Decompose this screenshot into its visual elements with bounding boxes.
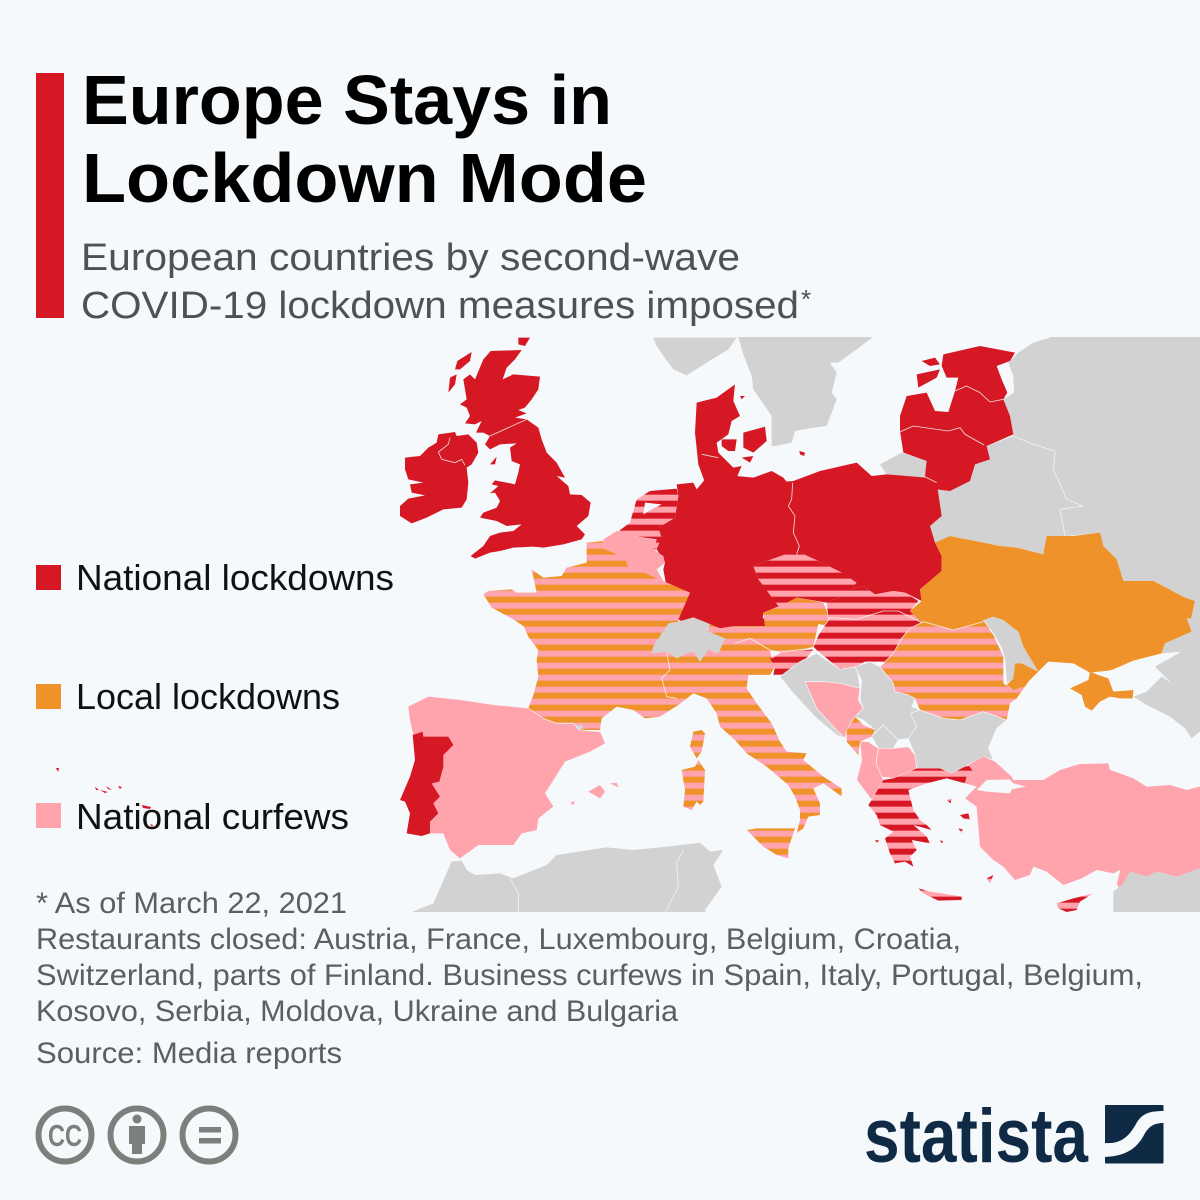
- Lesbos and Chios: [958, 813, 970, 833]
- legend item: national lockdowns: National lockdowns: [76, 557, 394, 598]
- title: [82, 61, 647, 217]
- Corsica: [690, 730, 705, 758]
- border lines: [772, 611, 1120, 883]
- Norway: [653, 338, 737, 375]
- Ukraine north: [910, 533, 1195, 629]
- Spain: [408, 697, 605, 858]
- source: Source: Media reports: [36, 1037, 342, 1070]
- legend: [36, 557, 394, 837]
- Italy: [662, 638, 842, 833]
- Kosovo: [872, 725, 898, 748]
- southern Russia: [1133, 618, 1200, 738]
- Slovenia: [770, 649, 813, 675]
- Portugal: [400, 732, 453, 836]
- Sweden: [738, 337, 873, 446]
- logo: statista icon: [1105, 1105, 1164, 1164]
- Great Britain: [460, 350, 591, 559]
- Germany: [657, 471, 800, 628]
- Sardinia: [682, 760, 705, 810]
- Middle East: [1113, 868, 1200, 913]
- Russia and Belarus: [930, 337, 1200, 629]
- North Africa: [408, 843, 723, 913]
- Montenegro: [847, 717, 875, 755]
- icon: creative commons: [38, 1108, 92, 1162]
- Bulgaria: [908, 710, 1007, 773]
- Lithuania: [900, 426, 990, 491]
- footnote: * As of March 22, 2021: [36, 887, 347, 920]
- subtitle: *: [801, 284, 811, 314]
- logo: statista wordmark: statista: [864, 1094, 1089, 1179]
- Ukraine south: [920, 617, 1192, 673]
- Albania: [857, 742, 883, 800]
- Moldova: [983, 617, 1038, 683]
- map region: north-west Europe: [400, 338, 800, 629]
- Hungary: [813, 611, 922, 670]
- Greece: [868, 765, 973, 867]
- Austria: [708, 598, 830, 653]
- Scottish islands: [448, 338, 530, 464]
- subtitle: COVID-19 lockdown measures imposed: [81, 285, 799, 327]
- subtitle: [81, 237, 811, 327]
- footnote: Restaurants closed: Austria, France, Luxembourg, Belgium, Croatia,: [36, 923, 961, 956]
- France north: [483, 541, 690, 629]
- Crimea: [1070, 672, 1133, 711]
- Ireland: [400, 432, 478, 523]
- Slovakia: [827, 586, 922, 623]
- Sea of Marmara: [977, 779, 1026, 793]
- border lines: [788, 386, 1083, 554]
- Cyprus: [1057, 893, 1093, 912]
- France south: [520, 618, 678, 730]
- map region: south-west Europe: [400, 598, 842, 913]
- Czech Republic: [753, 553, 857, 606]
- Odesa region: [1007, 663, 1038, 690]
- Netherlands: [617, 489, 678, 549]
- Serbia: [855, 662, 920, 740]
- title: Lockdown Mode: [82, 139, 647, 217]
- Estonian islands: [917, 358, 940, 388]
- legend item: national curfews: National curfews: [76, 796, 349, 837]
- Denmark: [695, 384, 767, 486]
- Estonia: [942, 346, 1015, 402]
- legend item: local lockdowns: Local lockdowns: [76, 676, 340, 717]
- Azores and Madeira islands: [56, 768, 153, 827]
- Bosnia and Herzegovina: [805, 682, 863, 738]
- Andorra: [575, 724, 583, 731]
- title accent bar: [36, 73, 64, 318]
- map region: south-east Europe: [770, 611, 1200, 913]
- footnote: [36, 887, 1143, 1028]
- border lines: [510, 638, 770, 913]
- Balearic Islands: [570, 783, 618, 805]
- map region: north-east Europe: [738, 337, 1200, 629]
- Kaliningrad: [880, 453, 927, 478]
- Belgium and Luxembourg: [603, 531, 665, 581]
- icon: attribution: [110, 1108, 164, 1162]
- map of Europe: [400, 337, 1200, 913]
- northern Ireland and Scotland border lines: [438, 419, 799, 553]
- subtitle: European countries by second-wave: [81, 237, 740, 279]
- footnote: Switzerland, parts of Finland. Business curfews in Spain, Italy, Portugal, Belgium,: [36, 959, 1143, 992]
- Sicily: [747, 828, 795, 858]
- icon: creative commons: CC: [48, 1118, 82, 1153]
- Switzerland: [652, 617, 725, 662]
- Latvia: [900, 386, 1013, 446]
- Greek islands: [875, 798, 993, 901]
- Germany south edge: [678, 618, 765, 628]
- Croatia: [780, 653, 860, 738]
- IJsselmeer: [643, 503, 662, 514]
- Romania: [880, 622, 1025, 720]
- North Macedonia: [876, 747, 917, 778]
- Turkey: [965, 757, 1200, 890]
- title: Europe Stays in: [82, 61, 612, 139]
- footnote: Kosovo, Serbia, Moldova, Ukraine and Bulgaria: [36, 995, 678, 1028]
- Gotland: [799, 451, 805, 456]
- Poland: [770, 463, 942, 601]
- icon: no derivatives: [182, 1108, 236, 1162]
